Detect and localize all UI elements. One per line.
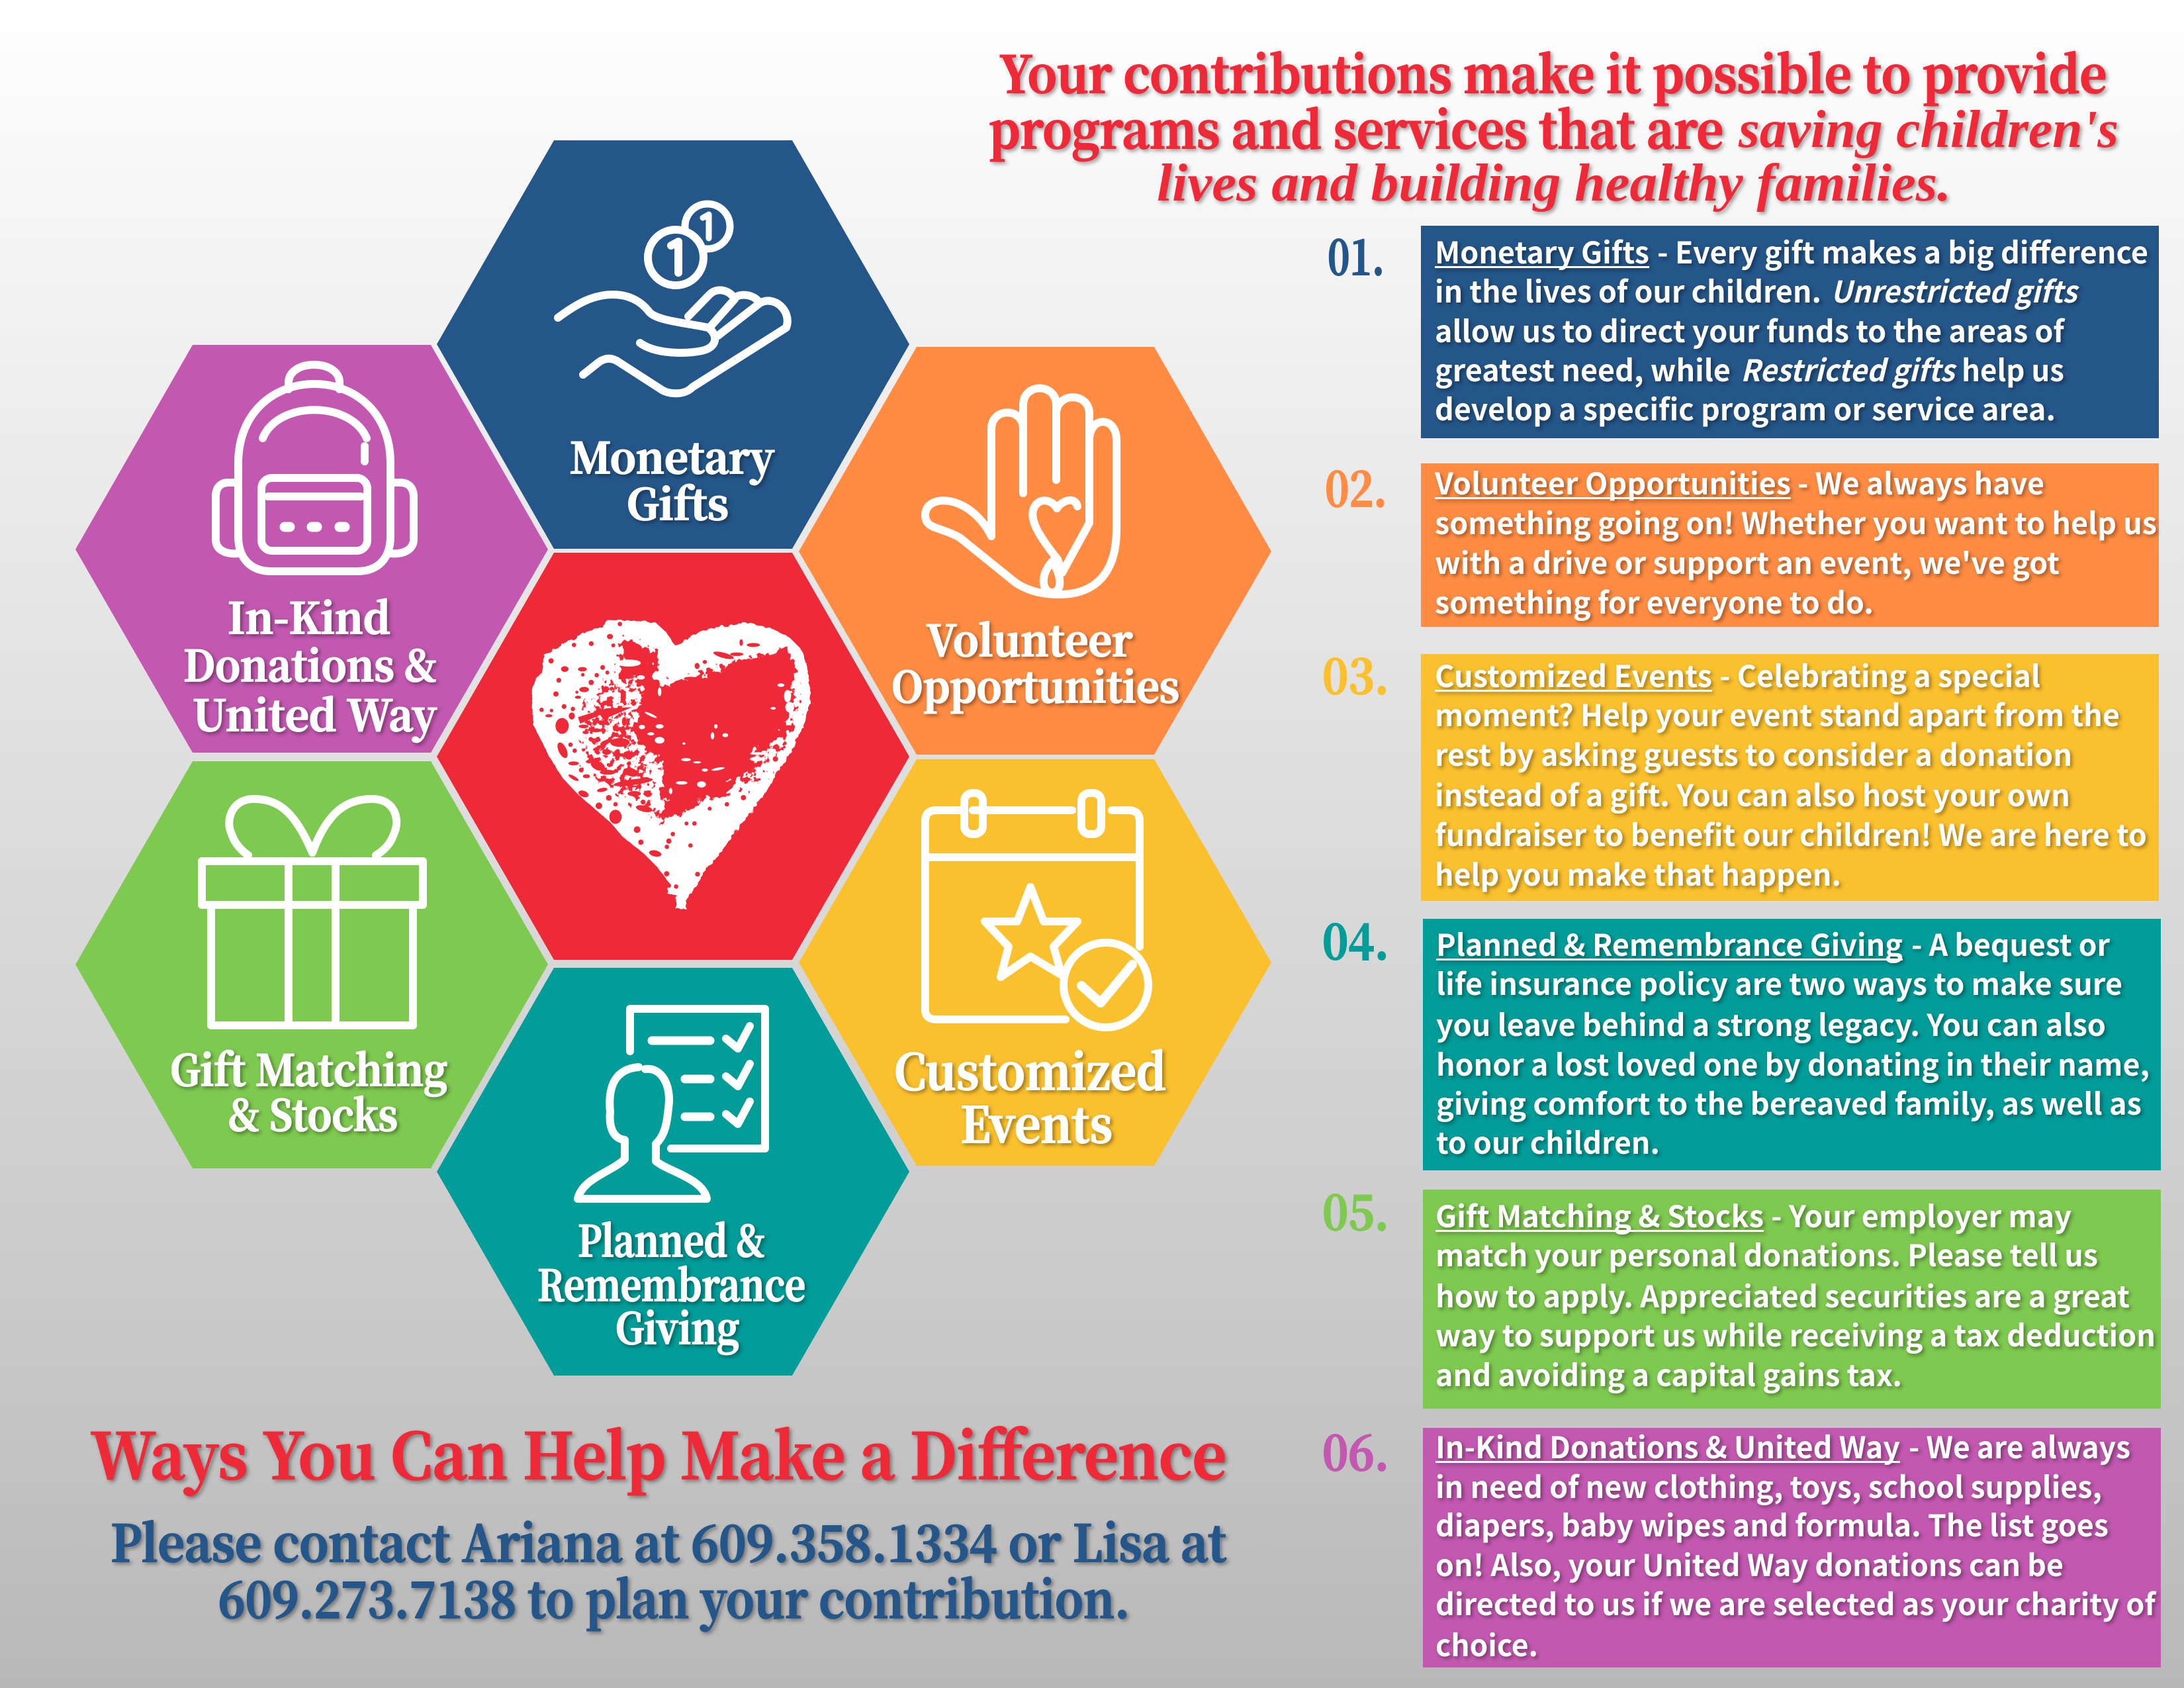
panel: Volunteer Opportunities description: something going on! Whether you want to help us [1435,500,2157,543]
text block: contact information [111,1504,1226,1632]
panel: Monetary Gifts description [1421,226,2159,438]
panel: Planned & Remembrance Giving description: Planned & Remembrance Giving [1436,921,1903,964]
panel: Customized Events description: moment? Help your event stand apart from the [1435,692,2120,735]
icon: coins over open hand [558,204,788,393]
panel: Gift Matching & Stocks description: how to apply. Appreciated securities are a great [1435,1273,2130,1316]
panel: Monetary Gifts description: allow us to direct your funds to the areas of [1435,308,2066,351]
label: Gift Matching & Stocks: & Stocks [228,1082,398,1143]
panel: Monetary Gifts description: in the lives of our children. [1435,268,1821,311]
icon: textured white heart [531,620,811,909]
panel: Planned & Remembrance Giving description: honor a lost loved one by donating in their name, [1436,1041,2150,1084]
panel: hexagon Planned & Remembrance Giving [437,968,909,1376]
label: Customized Events: Customized [894,1034,1166,1104]
label: Planned & Remembrance Giving: Giving [615,1295,739,1356]
label: Monetary Gifts: Monetary [570,425,775,486]
panel: In-Kind Donations & United Way description [1423,1424,2161,1667]
panel: Monetary Gifts description: help us [1962,347,2064,390]
label: Gift Matching & Stocks [170,1037,447,1143]
panel: Customized Events description: help you make that happen. [1435,851,1841,894]
panel: Planned & Remembrance Giving description [1423,919,2161,1170]
number 01: 01. [1328,219,1385,289]
heading: Ways You Can Help Make a Difference: Ways You Can Help Make a Difference [91,1407,1226,1497]
panel: Customized Events description: instead of a gift. You can also host your own [1435,772,2070,815]
label: Gift Matching & Stocks: Gift Matching [170,1037,447,1098]
panel: Monetary Gifts description: - Every gift makes a big difference [1657,229,2148,272]
icon: open hand with heart [925,388,1116,594]
panel: Gift Matching & Stocks description: way to support us while receiving a tax deduction [1435,1312,2156,1355]
panel: Gift Matching & Stocks description: match your personal donations. Please tell us [1435,1232,2098,1275]
panel: In-Kind Donations & United Way description: on! Also, your United Way donations can be [1435,1542,2064,1585]
label: Planned & Remembrance Giving: Planned & [578,1208,765,1269]
panel: In-Kind Donations & United Way description: choice. [1435,1622,1538,1665]
number 03: 03. [1322,638,1389,708]
panel: Gift Matching & Stocks description [1423,1190,2161,1409]
panel: Customized Events description: - Celebrating a special [1719,653,2040,696]
panel: Volunteer Opportunities description: Volunteer Opportunities [1434,460,1791,503]
label: In-Kind Donations & United Way [183,585,437,743]
panel: hexagon Volunteer Opportunities [799,347,1271,755]
panel: In-Kind Donations & United Way description: in need of new clothing, toys, school supplies, [1435,1464,2102,1507]
panel: Volunteer Opportunities description: something for everyone to do. [1435,579,1874,622]
panel: Planned & Remembrance Giving description: life insurance policy are two ways to make sure [1436,961,2122,1004]
panel: Gift Matching & Stocks description: Gift Matching & Stocks [1435,1193,1764,1236]
panel: Gift Matching & Stocks description: - Your employer may [1771,1193,2071,1236]
panel: Planned & Remembrance Giving description: giving comfort to the bereaved family, as well as [1436,1080,2142,1123]
label: Customized Events [894,1034,1166,1157]
panel: hexagon Monetary Gifts [437,140,909,549]
label: Monetary Gifts [570,425,775,532]
panel: Monetary Gifts description: Restricted gifts [1741,347,1958,390]
panel: Customized Events description: Customized Events [1435,653,1712,696]
panel: Planned & Remembrance Giving description: you leave behind a strong legacy. You can also [1436,1002,2106,1045]
heading: contributions statement [989,35,2118,212]
panel: Volunteer Opportunities description [1421,460,2159,627]
panel: Monetary Gifts description: Unrestricted gifts [1831,268,2080,311]
number 05: 05. [1322,1174,1389,1244]
icon: calendar with star and check [925,793,1148,1027]
label: Planned & Remembrance Giving [537,1208,805,1356]
label: Volunteer Opportunities [891,608,1179,715]
heading: contributions statement: saving children's [1738,101,2118,159]
panel: hexagon In-Kind Donations [75,345,548,753]
number 04: 04. [1322,904,1389,974]
label: Customized Events: Events [960,1087,1113,1157]
panel: Planned & Remembrance Giving description: to our children. [1436,1119,1660,1162]
label: In-Kind Donations & United Way: In-Kind [228,585,390,646]
number 02: 02. [1325,451,1387,521]
panel: Gift Matching & Stocks description: and avoiding a capital gains tax. [1435,1352,1902,1395]
panel: Monetary Gifts description: Monetary Gifts [1435,229,1649,272]
number 06: 06. [1322,1415,1389,1485]
panel: In-Kind Donations & United Way description: diapers, baby wipes and formula. The list goes [1435,1502,2109,1545]
panel: In-Kind Donations & United Way description: - We are always [1909,1424,2130,1467]
panel: hexagon Gift Matching & Stocks [75,761,548,1168]
text block: contact information: 609.273.7138 to plan your contribution. [218,1560,1130,1632]
panel: In-Kind Donations & United Way description: In-Kind Donations & United Way [1435,1424,1900,1467]
panel: Volunteer Opportunities description: - We always have [1797,460,2044,503]
panel: Monetary Gifts description: develop a specific program or service area. [1435,386,2056,429]
panel: Volunteer Opportunities description: with a drive or support an event, we've got [1435,539,2060,583]
heading: contributions statement: lives and building healthy families. [1157,154,1951,212]
panel: center hexagon with heart [437,553,909,960]
text block: contact information: Please contact Ariana at 609.358.1334 or Lisa at [111,1504,1226,1576]
panel: Customized Events description: rest by asking guests to consider a donation [1435,731,2072,774]
icon: person with checklist [578,1009,765,1199]
label: Planned & Remembrance Giving: Remembrance [537,1252,805,1313]
label: Volunteer Opportunities: Volunteer [927,608,1132,669]
panel: Customized Events description [1421,653,2159,901]
panel: In-Kind Donations & United Way description: directed to us if we are selected as your charity of [1435,1581,2157,1624]
label: Monetary Gifts: Gifts [627,471,729,532]
panel: hexagon Customized Events [799,759,1271,1166]
label: Volunteer Opportunities: Opportunities [891,654,1179,715]
panel: Monetary Gifts description: greatest need, while [1435,347,1731,390]
label: In-Kind Donations & United Way: Donations & [183,633,437,694]
panel: Customized Events description: fundraiser to benefit our children! We are here to [1435,812,2147,855]
heading: contributions statement: programs and services that are [989,91,1723,163]
label: In-Kind Donations & United Way: United Way [193,682,437,743]
icon: backpack [216,365,414,571]
panel: Planned & Remembrance Giving description: - A bequest or [1911,921,2110,964]
icon: gift box [202,799,423,1025]
heading: contributions statement: Your contributions make it possible to provide [999,35,2107,107]
